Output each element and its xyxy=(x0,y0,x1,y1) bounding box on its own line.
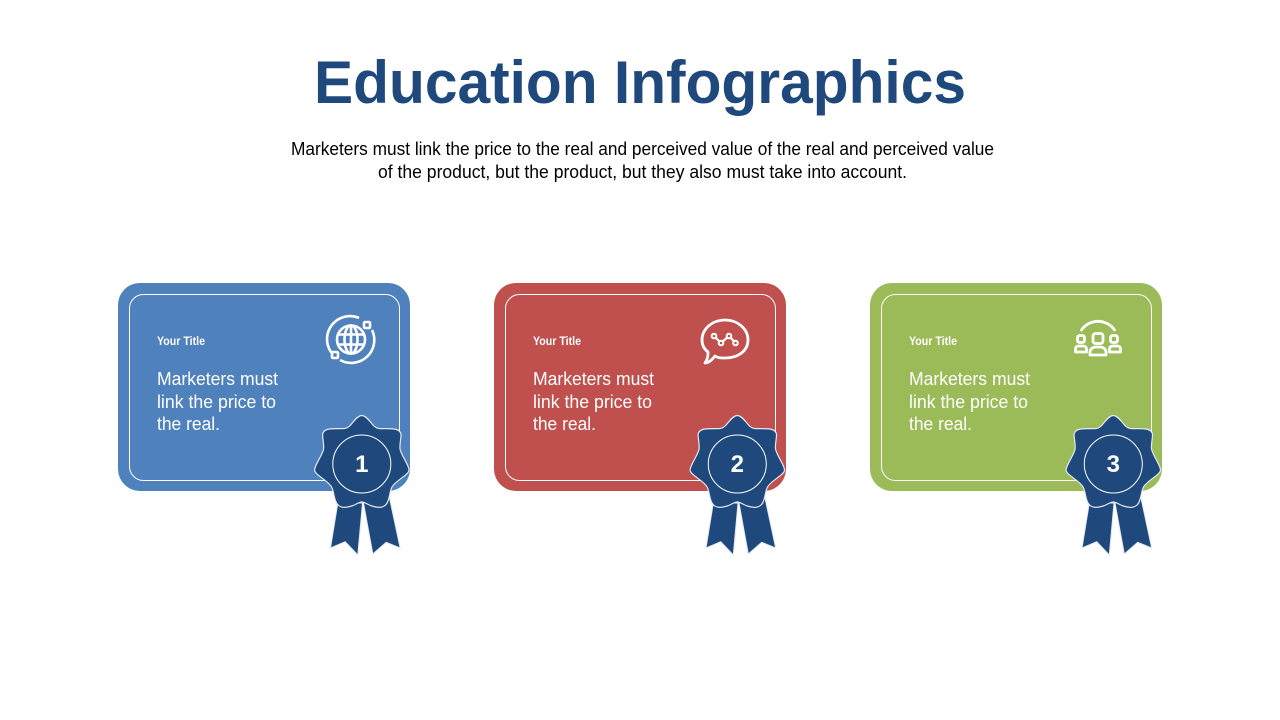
subtitle text: Marketers must link the price to the real and perceived value of the real and perceived value xyxy=(291,139,994,159)
badge 3: 3 xyxy=(1107,451,1120,478)
card 2 inner border xyxy=(506,294,776,480)
badge 2: 2 xyxy=(731,451,744,478)
card 1 heading: Your Title xyxy=(157,336,205,348)
card 3 body text: the real. xyxy=(909,414,972,434)
card 2 body text: link the price to xyxy=(533,392,652,412)
icon: globe xyxy=(327,316,374,363)
card 1 body text xyxy=(157,369,278,434)
card 1 body text: Marketers must xyxy=(157,369,278,389)
badge 2 xyxy=(690,416,784,555)
card 1 body text: link the price to xyxy=(157,392,276,412)
panel: card 2 xyxy=(494,283,786,555)
panel: card 1 xyxy=(118,283,410,555)
card 3 heading: Your Title xyxy=(909,336,957,348)
card 2 heading: Your Title xyxy=(533,336,581,348)
badge 1 xyxy=(315,416,409,555)
badge 1: 1 xyxy=(355,451,368,478)
title: Education Infographics xyxy=(314,49,966,116)
card 1 body text: the real. xyxy=(157,414,220,434)
card 3 background xyxy=(870,283,1162,491)
card 2 background xyxy=(494,283,786,491)
card 2 body text xyxy=(533,369,654,434)
badge 3 xyxy=(1066,416,1160,555)
card 2 body text: the real. xyxy=(533,414,596,434)
card 1 inner border xyxy=(130,294,400,480)
icon: group of people xyxy=(1076,321,1120,355)
panel: card 3 xyxy=(870,283,1162,555)
card 1 background xyxy=(118,283,410,491)
card 3 body text: Marketers must xyxy=(909,369,1030,389)
subtitle text: of the product, but the product, but they also must take into account. xyxy=(378,162,907,182)
subtitle text xyxy=(291,139,994,182)
icon: speech bubble with line chart xyxy=(702,320,748,363)
card 3 body text xyxy=(909,369,1030,434)
card 2 body text: Marketers must xyxy=(533,369,654,389)
card 3 inner border xyxy=(882,294,1152,480)
card 3 body text: link the price to xyxy=(909,392,1028,412)
